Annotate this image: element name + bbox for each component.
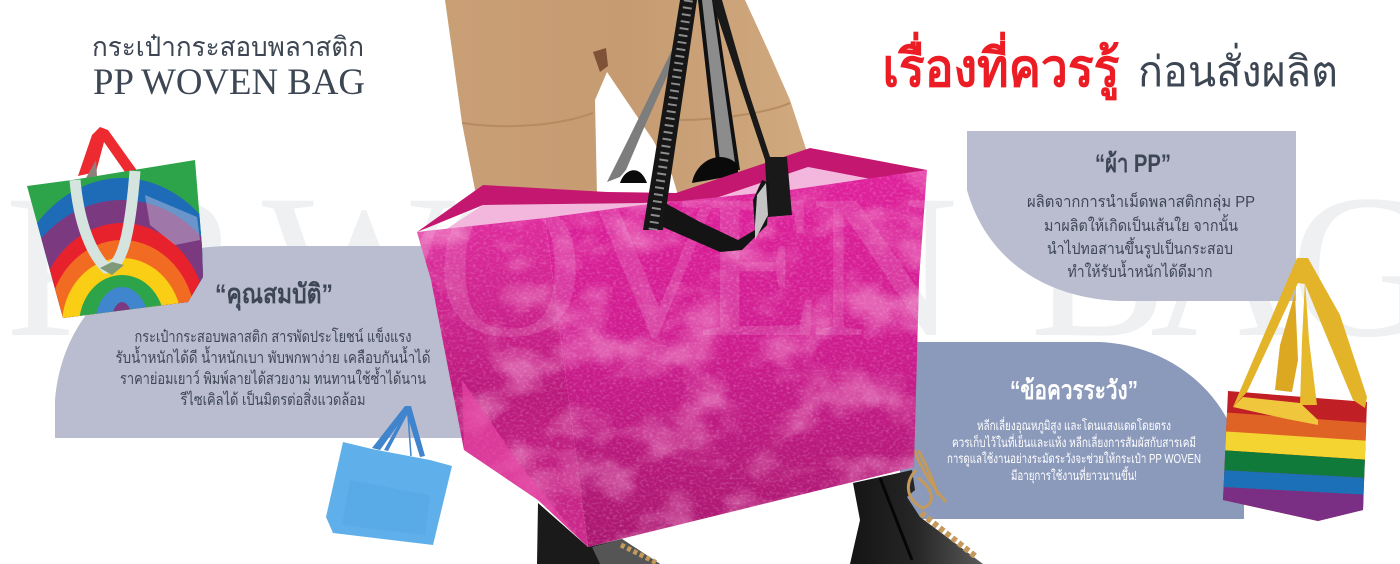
text block: PP fabric: ผลิตจากการนำเม็ดพลาสติกกลุ่ม PP — [1027, 191, 1255, 212]
watermark over bag: PP WOVEN BAG — [5, 153, 1400, 380]
text block: cautions: ควรเก็บไว้ในที่เย็นและแห้ง หลีกเลี่ยงการสัมผัสกับสารเคมี — [952, 433, 1196, 450]
illustration: blue tote bag — [326, 406, 452, 545]
illustration: rainbow tote bag — [27, 127, 203, 318]
illustration: back handles of pink bag — [607, 0, 740, 183]
title: left heading — [92, 32, 365, 103]
text block: properties: รับน้ำหนักได้ดี น้ำหนักเบา พับพกพาง่าย เคลือบกันน้ำได้ — [116, 346, 430, 367]
text block: PP fabric — [1027, 150, 1255, 281]
text block: properties: กระเป๋ากระสอบพลาสติก สารพัดประโยชน์ แข็งแรง — [134, 326, 412, 346]
title: right heading: ก่อนสั่งผลิต — [1138, 43, 1338, 95]
text block: cautions: “ข้อควรระวัง” — [1010, 375, 1138, 405]
bag texture — [410, 165, 930, 550]
text block: PP fabric: มาผลิตให้เกิดเป็นเส้นใย จากนั้น — [1044, 214, 1238, 235]
text block: cautions: มีอายุการใช้งานที่ยาวนานขึ้น! — [1011, 466, 1137, 484]
bag large blotches — [410, 165, 930, 550]
left boot — [537, 503, 660, 564]
yellow bag front straps — [1300, 280, 1317, 405]
text block: cautions — [947, 375, 1201, 484]
watermark: PP WOVEN BAG: PP WOVEN BAG — [5, 153, 1400, 380]
text block: PP fabric: ทำให้รับน้ำหนักได้ดีมาก — [1068, 260, 1212, 281]
title: right heading — [882, 32, 1338, 101]
title: left heading: กระเป๋ากระสอบพลาสติก — [92, 32, 364, 62]
title: left heading: PP WOVEN BAG — [93, 62, 365, 103]
yellow bag stripes — [1223, 391, 1367, 521]
text block: PP fabric: นำไปทอสานขึ้นรูปเป็นกระสอบ — [1047, 237, 1233, 259]
bag front panel — [545, 170, 927, 547]
yellow bag rear straps — [1275, 293, 1298, 392]
rainbow bag straps — [75, 171, 135, 268]
bag side panel — [417, 218, 588, 547]
illustration: front handles of pink bag — [643, 0, 792, 252]
text block: properties: รีไซเคิลได้ เป็นมิตรต่อสิ่งแวดล้อม — [180, 388, 366, 409]
right boot — [850, 470, 983, 564]
illustration: boots — [537, 450, 983, 564]
text block: PP fabric: “ผ้า PP” — [1095, 150, 1171, 178]
panel: cautions background — [900, 342, 1244, 519]
bag interior lining — [445, 167, 876, 230]
text block: properties: “คุณสมบัติ” — [215, 279, 333, 311]
title: right heading: เรื่องที่ควรรู้ — [882, 32, 1120, 101]
rainbow bag body — [27, 160, 203, 318]
panel: properties background — [55, 246, 480, 438]
bag rim — [417, 148, 927, 232]
illustration: legs in tan trousers — [445, 0, 808, 195]
panel: PP fabric background — [967, 131, 1296, 301]
text block: properties: ราคาย่อมเยาว์ พิมพ์ลายได้สวยงาม ทนทานใช้ซ้ำได้นาน — [120, 367, 426, 388]
text block: cautions: หลีกเลี่ยงอุณหภูมิสูง และโดนแสงแดดโดยตรง — [977, 417, 1171, 434]
illustration: rainbow stripe tote bag — [1220, 258, 1370, 525]
text block: cautions: การดูแลใช้งานอย่างระมัดระวังจะช่วยให้กระเป๋า PP WOVEN — [947, 451, 1201, 467]
illustration: large pink woven bag — [417, 148, 927, 547]
rainbow bag handle — [78, 127, 138, 176]
text block: properties — [116, 279, 430, 409]
